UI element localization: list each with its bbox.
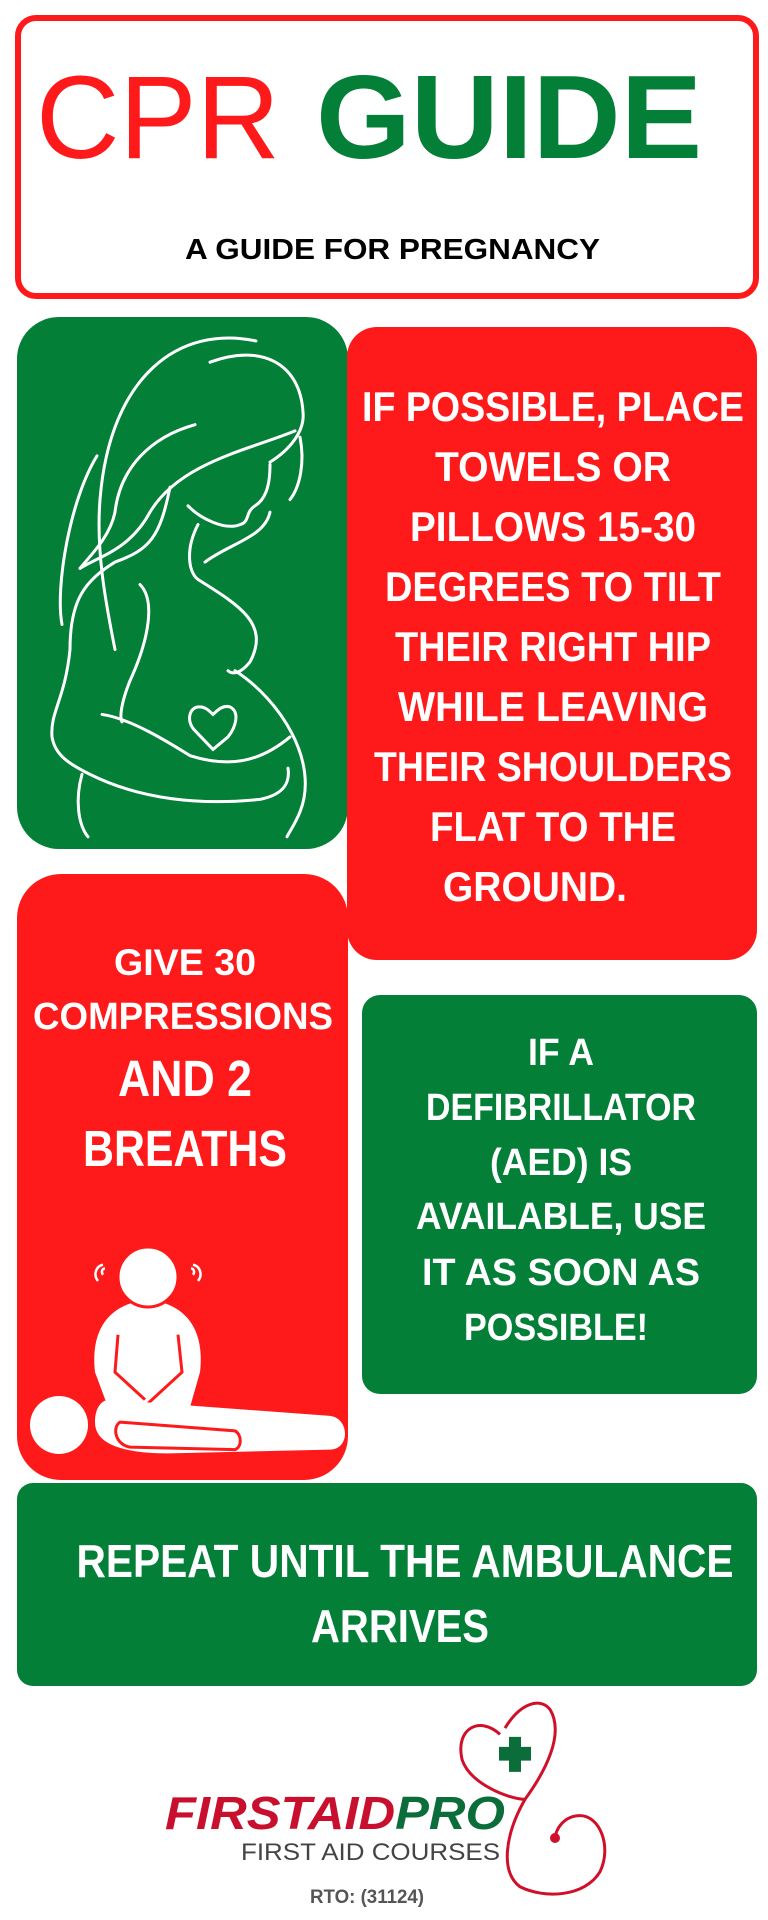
panel: place towels instruction [347, 327, 757, 960]
text block: compressions: COMPRESSIONS [33, 996, 333, 1038]
RTO number: RTO: (31124) [310, 1887, 424, 1908]
text block: AED: POSSIBLE! [464, 1307, 648, 1349]
text block: AED: (AED) IS [490, 1142, 632, 1184]
text block: AED: IT AS SOON AS [422, 1252, 700, 1294]
text block: repeat [76, 1535, 734, 1652]
text block: towels instructions: PILLOWS 15-30 [410, 503, 696, 550]
panel: pregnant woman illustration [17, 317, 348, 849]
text block: towels instructions: FLAT TO THE [430, 803, 676, 850]
panel: compressions [17, 874, 348, 1480]
title [36, 51, 702, 184]
title: CPR [36, 52, 280, 184]
icon: CPR rescuer [30, 1247, 345, 1454]
text block: compressions: AND 2 [118, 1050, 252, 1107]
text block: compressions: GIVE 30 [114, 942, 256, 983]
text block: AED: IF A [528, 1032, 594, 1074]
text block: towels instructions [362, 383, 744, 910]
icon: pregnant woman line art [52, 338, 305, 837]
panel: repeat until ambulance [17, 1483, 757, 1686]
text block: AED: DEFIBRILLATOR [426, 1087, 696, 1129]
text block: towels instructions: THEIR SHOULDERS [374, 743, 732, 790]
logo: First Aid Pro [165, 1703, 605, 1908]
text block: compressions: BREATHS [83, 1120, 287, 1177]
text block: towels instructions: THEIR RIGHT HIP [395, 623, 711, 670]
header box [18, 18, 756, 296]
icon: heart stethoscope [461, 1703, 605, 1894]
title: GUIDE [316, 51, 702, 184]
text block: towels instructions: DEGREES TO TILT [385, 563, 721, 610]
text block: towels instructions: GROUND. [443, 863, 627, 910]
text block: towels instructions: WHILE LEAVING [398, 683, 708, 730]
text block: AED: AVAILABLE, USE [416, 1196, 706, 1238]
text block: towels instructions: TOWELS OR [435, 443, 671, 490]
text block: AED [416, 1032, 706, 1349]
text block: repeat: ARRIVES [311, 1600, 489, 1652]
text block: compressions [33, 942, 333, 1177]
panel: defibrillator [362, 995, 757, 1394]
subtitle: A GUIDE FOR PREGNANCY [185, 234, 600, 266]
logo text: FIRSTAID PRO [165, 1787, 505, 1839]
tagline: FIRST AID COURSES [241, 1839, 500, 1866]
